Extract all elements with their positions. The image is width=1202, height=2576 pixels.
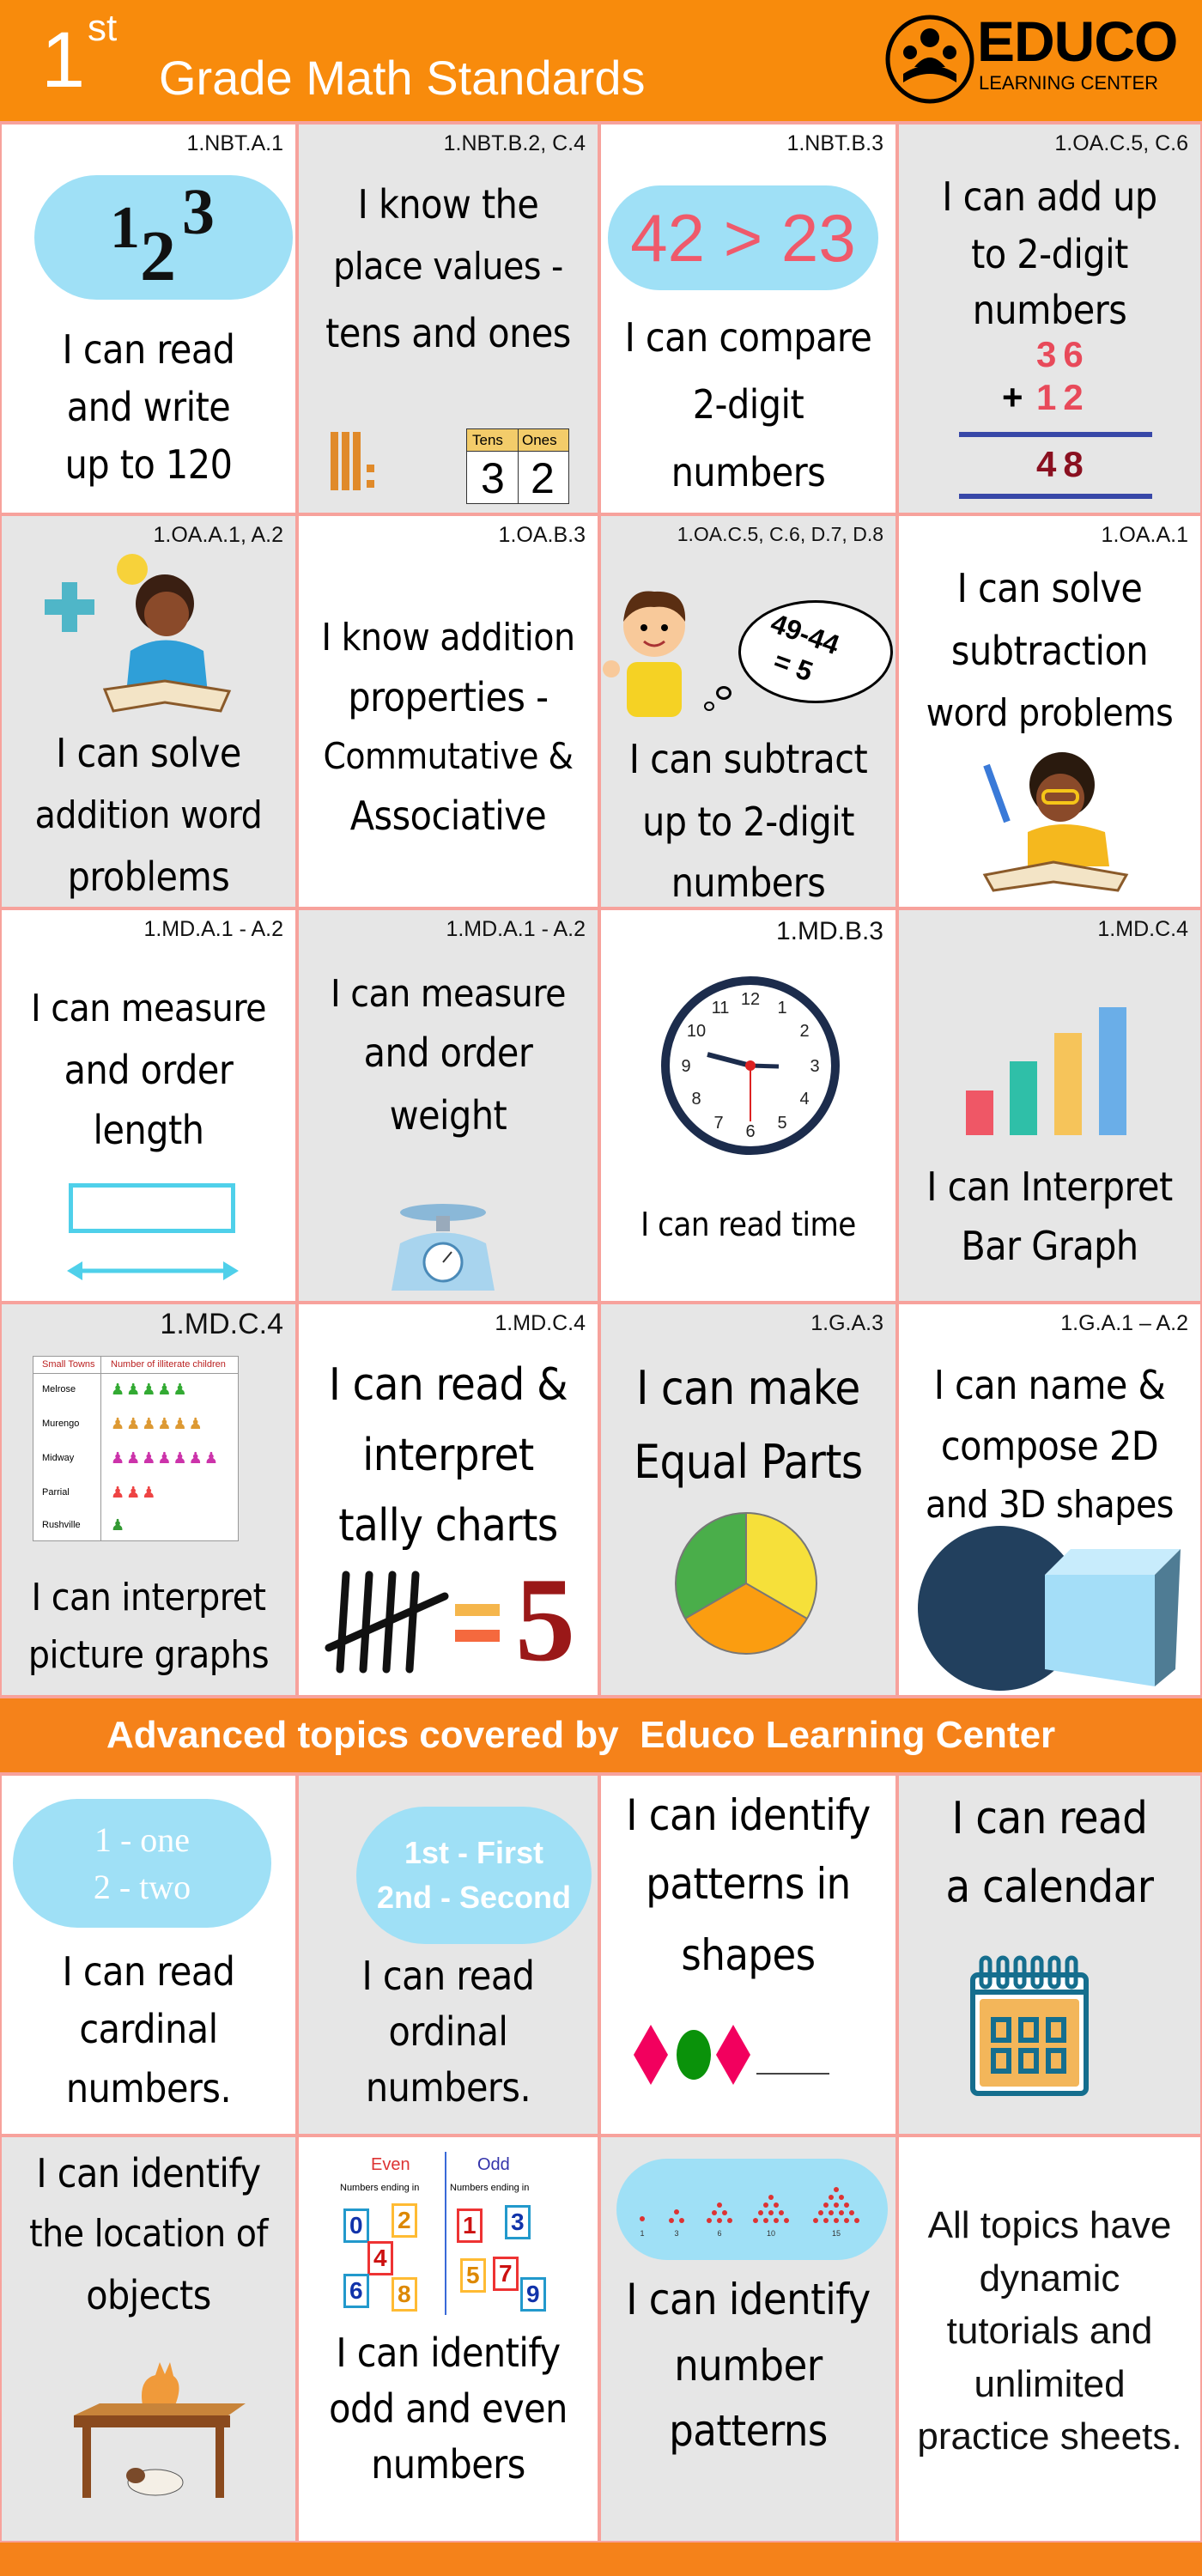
cell: shape patterns [601, 1776, 895, 2134]
icon: 42 > 23 pill: 42 > 23 [630, 200, 856, 276]
cell: odd and even: odd and even [329, 2385, 568, 2432]
cell: picture graphs: 1.MD.C.4 [160, 1308, 283, 1340]
icon: clock: 7 [713, 1114, 724, 1133]
logo: LEARNING CENTER [979, 72, 1158, 94]
header [0, 0, 1202, 121]
cell: subtraction word problems: 1.OA.A.1 [1102, 523, 1188, 547]
icon: odd even chart: 9 [526, 2281, 540, 2307]
icon: ordinal pill [356, 1807, 592, 1944]
icon: picture graph table: ♟ [111, 1516, 126, 1534]
cell: location of objects: the location of [29, 2212, 268, 2256]
cell: ordinal: numbers. [366, 2064, 531, 2111]
cell: measure length: length [94, 1107, 203, 1153]
icon: thought bubble: 49-44 [767, 607, 843, 660]
cell: cardinal [2, 1776, 295, 2134]
icon: odd even chart: 0 [349, 2212, 363, 2239]
icon: 1 2 3 pill: 2 [140, 216, 176, 296]
cell: all topics note [899, 2137, 1200, 2541]
cell: place values: place values - [333, 245, 563, 289]
icon: tens ones table: Ones [522, 432, 557, 448]
cell: bar graph: Bar Graph [961, 1223, 1138, 1269]
cell: measure weight: I can measure [331, 972, 566, 1016]
icon: double arrow [67, 1261, 239, 1280]
cell: number patterns: I can identify [626, 2275, 871, 2324]
cell: addition properties: Associative [350, 793, 546, 839]
cell: addition word problems: problems [68, 854, 229, 900]
title [41, 7, 646, 105]
icon: base ten rods [331, 432, 374, 490]
cell: 2D 3D shapes: 1.G.A.1 – A.2 [1060, 1311, 1188, 1335]
cell: read and write up to 120: 1.NBT.A.1 [186, 131, 283, 155]
icon: circle [918, 1526, 1083, 1691]
cell: compare: I can compare [625, 314, 871, 361]
cell: cardinal: I can read [63, 1948, 234, 1995]
title: Grade Math Standards [159, 51, 646, 105]
cell: bar graph [899, 910, 1200, 1301]
cell: all topics note: tutorials and [947, 2310, 1152, 2352]
cell: bar graph: 1.MD.C.4 [1097, 917, 1188, 941]
icon: picture graph table: ♟♟♟♟♟ [111, 1381, 189, 1398]
cell: addition properties: Commutative & [324, 735, 573, 777]
cell: 2D 3D shapes [899, 1304, 1200, 1695]
cell: addition properties: properties - [348, 674, 549, 720]
icon: tens ones table: Tens [472, 432, 503, 448]
icon: addition: 48 [1036, 444, 1090, 484]
cell: compare: numbers [671, 449, 825, 495]
cell: compare [601, 125, 895, 513]
icon: clock [661, 976, 840, 1155]
cell: place values [299, 125, 598, 513]
title: st [88, 7, 117, 49]
cell: subtraction word problems: word problems [926, 691, 1173, 735]
icon: addition: + [1002, 377, 1023, 417]
icon: dot triangle pill: 3 [674, 2229, 679, 2238]
icon: ordinal pill: 1st - First [404, 1835, 543, 1870]
cell: read time: 1.MD.B.3 [776, 917, 883, 945]
cell: 2D 3D shapes: compose 2D [941, 1423, 1158, 1469]
icon: tens ones table: 3 [481, 454, 505, 502]
icon: cube [1045, 1549, 1181, 1686]
cell: shape patterns: I can identify [626, 1790, 871, 1840]
cell: number patterns: patterns [669, 2406, 828, 2456]
icon: addition: 12 [1036, 377, 1090, 417]
cell: subtract: up to 2-digit [642, 799, 854, 845]
cell: measure weight: and order [364, 1030, 532, 1076]
icon: picture graph table: Small Towns [42, 1359, 95, 1370]
icon: clock: 11 [712, 999, 729, 1018]
cell: all topics note: All topics have [928, 2204, 1171, 2246]
cell: ordinal: ordinal [389, 2008, 507, 2055]
advanced topics banner [0, 1698, 1202, 1772]
icon: tally = 5 [325, 1553, 575, 1686]
icon: cardinal pill: 1 - one [94, 1820, 190, 1859]
cell: all topics note: dynamic [980, 2257, 1120, 2300]
icon: tens ones table [466, 428, 569, 504]
icon: picture graph table: Murengo [42, 1419, 79, 1429]
cell: ordinal [299, 1776, 598, 2134]
icon: odd even chart: 1 [463, 2212, 477, 2239]
icon: dot triangle pill: 15 [832, 2229, 841, 2238]
cell: equal parts: I can make [636, 1361, 860, 1415]
icon: clock: 2 [799, 1022, 810, 1041]
cell: read time: I can read time [640, 1206, 856, 1243]
cell: subtraction word problems: I can solve [957, 565, 1142, 611]
icon: picture graph table [33, 1356, 239, 1541]
title: 1 [41, 16, 85, 104]
cell: place values: tens and ones [325, 310, 571, 356]
cell: 2D 3D shapes: I can name & [934, 1362, 1165, 1408]
cell: add: numbers [973, 287, 1126, 333]
cell: compare: 2-digit [693, 381, 804, 428]
cell: tally charts: I can read & [329, 1359, 568, 1411]
icon: ordinal pill: 2nd - Second [377, 1880, 571, 1915]
icon: addition [959, 334, 1152, 499]
icon: picture graph table: Melrose [42, 1384, 76, 1394]
cell: picture graphs: I can interpret [32, 1576, 265, 1619]
cell: measure weight: weight [390, 1092, 507, 1139]
cell: add: I can add up [942, 173, 1157, 220]
icon: clock: 12 [741, 990, 760, 1009]
cell: measure length [2, 910, 295, 1301]
cell: number patterns: number [674, 2341, 823, 2391]
cell: location of objects: I can identify [36, 2150, 261, 2196]
icon: dot triangle pill: 6 [717, 2229, 722, 2238]
icon: clock: 1 [777, 999, 787, 1018]
icon: 1 2 3 pill: 3 [182, 176, 215, 248]
cell: subtraction word problems: subtraction [951, 628, 1148, 674]
cell: tally charts: tally charts [338, 1500, 558, 1552]
cell: location of objects: objects [86, 2272, 211, 2318]
cell: read and write up to 120: I can read [63, 326, 234, 373]
cell: tally charts [299, 1304, 598, 1695]
cell: odd and even [299, 2137, 598, 2541]
icon: addition: 36 [1036, 334, 1090, 374]
cell: subtract: I can subtract [629, 736, 867, 782]
cell: bar graph: I can Interpret [926, 1163, 1173, 1210]
cell: location of objects [2, 2137, 295, 2541]
logo: EDUCO [977, 9, 1177, 73]
icon: odd even chart: 8 [398, 2281, 411, 2307]
icon: 42 > 23 pill [608, 185, 878, 290]
icon: cardinal pill: 2 - two [94, 1868, 191, 1906]
icon: odd even chart: Odd [477, 2155, 510, 2174]
cell: read time [601, 910, 895, 1301]
cell: addition properties [299, 516, 598, 907]
icon: thought bubble [704, 600, 893, 711]
icon: clock: 8 [691, 1090, 701, 1109]
footer bar [0, 2543, 1202, 2576]
icon: picture graph table: ♟♟♟♟♟♟♟ [111, 1449, 220, 1467]
cell: measure length: and order [64, 1047, 233, 1093]
icon: odd even chart: 3 [511, 2208, 525, 2235]
icon: clock: 9 [681, 1057, 691, 1076]
cell: measure length: I can measure [31, 987, 266, 1030]
icon: calendar [970, 1956, 1089, 2096]
icon: picture graph table: Number of illiterate children [111, 1359, 226, 1370]
icon: odd even chart: Numbers ending in [340, 2183, 419, 2193]
cell: odd and even: I can identify [336, 2330, 561, 2376]
icon: picture graph table: Midway [42, 1453, 74, 1463]
cell: add [899, 125, 1200, 513]
cell: subtract: numbers [671, 860, 825, 906]
cell: cardinal: numbers. [66, 2065, 231, 2111]
icon: scale [392, 1204, 495, 1291]
cell: measure weight [299, 910, 598, 1301]
cell: addition properties: 1.OA.B.3 [499, 523, 586, 547]
icon: clock: 6 [745, 1122, 756, 1141]
icon: odd even chart: Numbers ending in [450, 2183, 529, 2193]
icon: dot triangle pill: 1 [640, 2229, 645, 2238]
cell: 2D 3D shapes: and 3D shapes [926, 1483, 1174, 1527]
cell: read and write up to 120: up to 120 [65, 441, 232, 488]
icon: clock: 10 [687, 1022, 706, 1041]
cell: all topics note: practice sheets. [917, 2415, 1182, 2458]
icon: cardinal pill [13, 1799, 271, 1928]
icon: bar chart [966, 1007, 1126, 1135]
cell: read and write up to 120: and write [67, 384, 230, 430]
cell: ordinal: I can read [362, 1953, 534, 1999]
icon: girl reading [45, 554, 232, 713]
icon: clock: 3 [810, 1057, 820, 1076]
icon: odd even chart: 5 [466, 2262, 480, 2288]
cell: place values: 1.NBT.B.2, C.4 [444, 131, 586, 155]
cell: tally charts: interpret [362, 1430, 534, 1481]
icon: picture graph table: Rushville [42, 1520, 81, 1530]
cell: read and write up to 120 [2, 125, 295, 513]
cell: addition word problems: 1.OA.A.1, A.2 [154, 523, 283, 547]
cell: addition word problems: addition word [35, 793, 262, 837]
icon: pattern [634, 2025, 829, 2085]
cell: calendar: I can read [952, 1793, 1147, 1844]
cell: cardinal: cardinal [79, 2006, 218, 2052]
cell: picture graphs: picture graphs [28, 1633, 269, 1677]
icon: dot triangle pill [616, 2159, 888, 2260]
cell: odd and even: numbers [371, 2441, 525, 2488]
cell: equal parts [601, 1304, 895, 1695]
cell: calendar [899, 1776, 1200, 2134]
icon: odd even chart: 6 [349, 2277, 363, 2304]
cell: subtract [601, 516, 895, 907]
cell: addition properties: I know addition [321, 616, 575, 659]
icon: 1 2 3 pill [34, 175, 293, 300]
icon: odd even chart: 4 [373, 2245, 387, 2271]
cell: add: 1.OA.C.5, C.6 [1054, 131, 1188, 155]
icon: picture graph table: ♟♟♟ [111, 1484, 157, 1501]
icon: 1 2 3 pill: 1 [110, 195, 140, 261]
icon: table with cat and dog [74, 2362, 246, 2498]
cell: add: to 2-digit [971, 231, 1128, 277]
cell: subtract: 1.OA.C.5, C.6, D.7, D.8 [677, 523, 883, 545]
cell: addition word problems [2, 516, 295, 907]
cell: shape patterns: patterns in [646, 1859, 851, 1909]
icon: boy reading [982, 752, 1128, 892]
icon: odd even chart: 7 [499, 2260, 513, 2287]
cell: all topics note: unlimited [974, 2363, 1126, 2404]
cell: subtraction word problems [899, 516, 1200, 907]
cell: tally charts: 1.MD.C.4 [495, 1311, 586, 1335]
advanced topics banner: Advanced topics covered by Educo Learning Center [106, 1714, 1055, 1756]
icon: thought bubble: = 5 [770, 645, 817, 687]
icon: dot triangle pill: 10 [767, 2229, 775, 2238]
cell: compare: 1.NBT.B.3 [786, 131, 883, 155]
cell: measure length: 1.MD.A.1 - A.2 [143, 917, 283, 941]
icon: tally = 5: 5 [515, 1553, 575, 1686]
icon: boy thinking [603, 591, 685, 717]
cell: shape patterns: shapes [681, 1930, 816, 1980]
cell: addition word problems: I can solve [56, 730, 241, 776]
icon: tens ones table: 2 [531, 454, 555, 502]
cell: number patterns [601, 2137, 895, 2541]
icon: odd even chart: 2 [398, 2207, 411, 2233]
cell: equal parts: 1.G.A.3 [810, 1311, 883, 1335]
icon: pie [675, 1512, 817, 1655]
icon: odd even chart [340, 2152, 546, 2315]
cell: measure weight: 1.MD.A.1 - A.2 [446, 917, 586, 941]
icon: clock: 4 [799, 1090, 810, 1109]
icon: picture graph table: Parrial [42, 1487, 70, 1498]
cell: calendar: a calendar [946, 1862, 1153, 1913]
cell: equal parts: Equal Parts [634, 1435, 863, 1489]
icon: odd even chart: Even [371, 2155, 410, 2174]
icon: rectangle [69, 1183, 235, 1233]
logo [886, 9, 1177, 103]
icon: clock: 5 [777, 1114, 787, 1133]
cell: picture graphs [2, 1304, 295, 1695]
icon: picture graph table: ♟♟♟♟♟♟ [111, 1415, 204, 1432]
cell: place values: I know the [358, 181, 538, 228]
